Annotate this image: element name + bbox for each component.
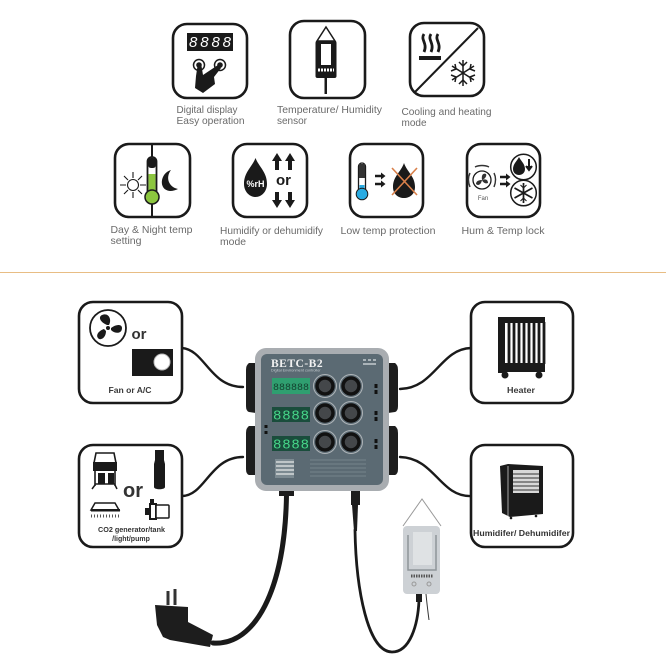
icon: day and night — [115, 144, 190, 217]
panel: humidifier / dehumidifier: Humidifer/ Dehumidifer — [473, 528, 571, 538]
caption: humidify: mode — [220, 237, 246, 248]
icon: temperature humidity sensor — [290, 21, 365, 98]
caption: sensor — [277, 105, 383, 127]
controller device: BETC-B2: Digital Environment controller — [271, 368, 321, 372]
cable: heater — [400, 348, 471, 389]
panel: CO2 generator/tank/light/pump: or — [123, 480, 143, 502]
caption: humidify: Humidify or dehumidify — [220, 226, 324, 237]
icon: digital display — [173, 24, 247, 98]
panel: fan or A/C — [79, 302, 182, 403]
controller device: BETC-B2: BETC-B2 — [271, 358, 323, 370]
icon: humidify or dehumidify — [233, 144, 307, 217]
caption: cooling heating: Cooling and heating — [402, 107, 492, 118]
hanging sensor — [403, 499, 441, 620]
sensor cable strain relief — [352, 505, 358, 531]
icon: hum and temp lock: Fan — [478, 196, 488, 202]
caption: cooling heating — [402, 107, 492, 129]
cable: power — [213, 495, 286, 643]
controller device: BETC-B2 — [246, 348, 398, 505]
panel: fan or A/C: Fan or A/C — [108, 385, 152, 395]
plug — [155, 605, 213, 647]
caption: day night — [110, 225, 193, 247]
icon: humidify or dehumidify: %rH — [246, 179, 265, 190]
icon: low temp protection — [350, 144, 423, 217]
caption: sensor: Temperature/ Humidity — [277, 105, 383, 116]
icon: cooling and heating mode — [410, 23, 484, 96]
controller device: BETC-B2: 8888 — [273, 438, 309, 454]
cable: humidifier — [400, 457, 471, 496]
cable: sensor — [355, 530, 419, 652]
icon: hum and temp lock — [467, 144, 540, 217]
divider line — [0, 272, 666, 273]
panel: humidifier / dehumidifier — [471, 445, 573, 547]
caption: digital display: Easy operation — [176, 116, 244, 127]
caption: cooling heating: mode — [402, 118, 427, 129]
caption: day night: Day & Night temp — [110, 225, 193, 236]
caption: low temp: Low temp protection — [340, 226, 436, 237]
icon: humidify or dehumidify: or — [276, 172, 291, 189]
panel: heater — [471, 302, 573, 403]
controller device: BETC-B2: 8888 — [273, 408, 309, 424]
controller device: BETC-B2: 888888 — [273, 383, 309, 394]
caption: digital display: Digital display — [176, 105, 238, 116]
panel: heater: Heater — [507, 385, 536, 395]
icon: digital display: 8888 — [189, 34, 232, 51]
caption: sensor: sensor — [277, 116, 308, 127]
panel: CO2 generator/tank/light/pump — [79, 445, 182, 547]
caption: hum temp lock: Hum & Temp lock — [462, 226, 545, 237]
plug pins — [168, 589, 175, 605]
caption: humidify — [220, 226, 324, 248]
caption: digital display — [176, 105, 244, 127]
panel: fan or A/C: or — [132, 326, 147, 343]
caption: day night: setting — [110, 236, 142, 247]
cable: co2 — [182, 457, 243, 496]
panel: CO2 generator/tank/light/pump: /light/pump — [112, 536, 150, 543]
panel: CO2 generator/tank/light/pump: CO2 generator/tank — [98, 527, 165, 534]
cable: fan — [182, 348, 243, 387]
